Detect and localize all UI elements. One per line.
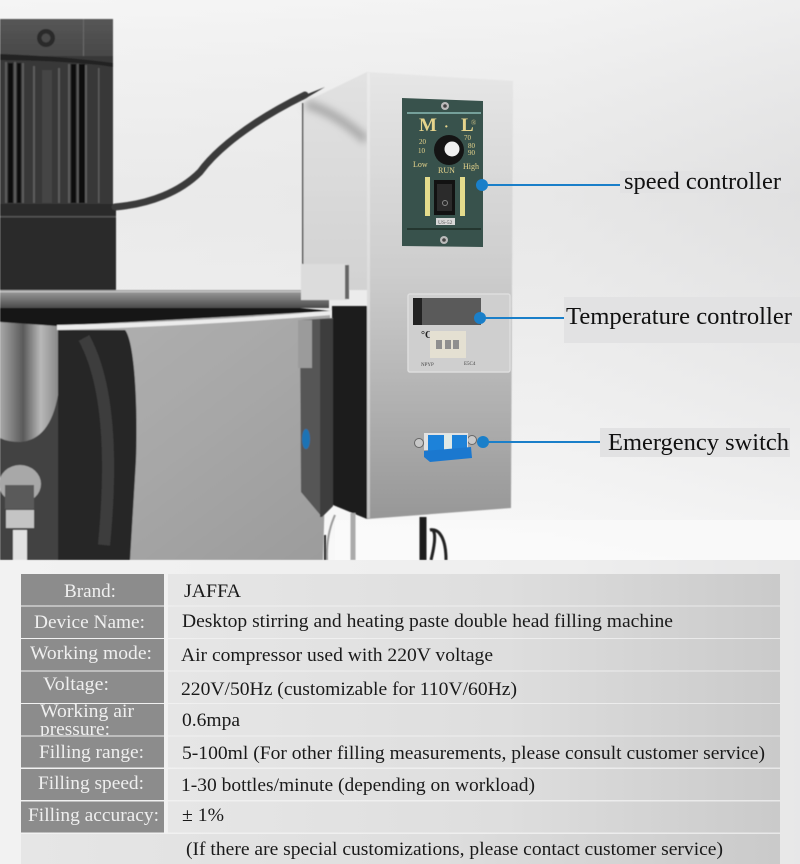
row: voltage: 220V/50Hz (customizable for 110V/60Hz) [181, 679, 517, 700]
row: brand [21, 574, 780, 606]
dark box side and tab [298, 306, 367, 519]
cables below box [325, 513, 446, 560]
temperature controller: E5C4 [464, 362, 476, 367]
temperature controller: °C [421, 330, 432, 341]
row: filling range: Filling range: [39, 742, 144, 763]
callout: emergency switch: Emergency switch [608, 430, 789, 456]
row: filling range: 5-100ml (For other filling measurements, please consult customer service) [182, 743, 765, 764]
row: device name: Desktop stirring and heating paste double head filling machine [182, 611, 673, 632]
row: voltage [21, 672, 780, 703]
speed controller panel: 20 [419, 138, 426, 146]
speed controller panel: Low [413, 160, 428, 169]
speed controller panel: ® [471, 119, 477, 127]
speed controller panel: 10 [418, 147, 426, 155]
specification table [0, 560, 800, 864]
row: brand: Brand: [64, 581, 116, 602]
speed controller panel: 80 [468, 142, 476, 150]
row: working air pressure [21, 701, 780, 740]
speed controller panel: High [463, 162, 479, 171]
row: filling speed [21, 769, 780, 800]
cable [115, 95, 305, 207]
row: working mode [21, 639, 780, 670]
callout: speed controller: speed controller [624, 169, 781, 195]
row: filling accuracy [21, 802, 780, 832]
arm rail and rim [0, 290, 331, 330]
temperature controller [408, 294, 510, 372]
row: working mode: Air compressor used with 220V voltage [181, 645, 493, 666]
speed controller panel: US-52 [438, 220, 453, 226]
control box [302, 72, 513, 519]
emergency switch [414, 433, 476, 462]
row: device name: Device Name: [34, 612, 145, 633]
callout: speed controller [476, 169, 790, 195]
motor [0, 19, 116, 290]
callout: temperature controller: Temperature controller [566, 304, 792, 330]
row: working air pressure: 0.6mpa [182, 710, 241, 731]
row: filling range [21, 736, 780, 768]
row: filling speed: Filling speed: [38, 773, 144, 794]
row: working air pressure: Working air [40, 701, 135, 722]
callout: temperature controller [474, 297, 800, 343]
tank [0, 312, 330, 560]
row: filling accuracy: Filling accuracy: [28, 805, 159, 826]
row: working air pressure: pressure: [40, 719, 110, 740]
temperature controller: NPYP [421, 363, 434, 368]
speed controller panel: 70 [464, 134, 472, 142]
speed controller panel: RUN [438, 166, 455, 175]
speed controller panel: 90 [468, 149, 476, 157]
row: voltage: Voltage: [43, 674, 109, 695]
row: customization note: (If there are special customizations, please contact customer service) [186, 839, 723, 860]
row: working mode: Working mode: [30, 643, 152, 664]
callout: emergency switch [477, 428, 790, 457]
row: filling accuracy: ± 1% [182, 805, 224, 826]
speed controller panel [402, 98, 483, 247]
photo: machine [0, 19, 513, 560]
speed controller panel: · [444, 120, 449, 135]
bracket [301, 264, 349, 300]
row: brand: JAFFA [184, 581, 241, 602]
speed controller panel: L [461, 115, 474, 136]
row: device name [21, 606, 780, 638]
speed controller panel: M [419, 115, 437, 136]
row: customization note [21, 834, 780, 864]
row: filling speed: 1-30 bottles/minute (depending on workload) [181, 775, 535, 796]
